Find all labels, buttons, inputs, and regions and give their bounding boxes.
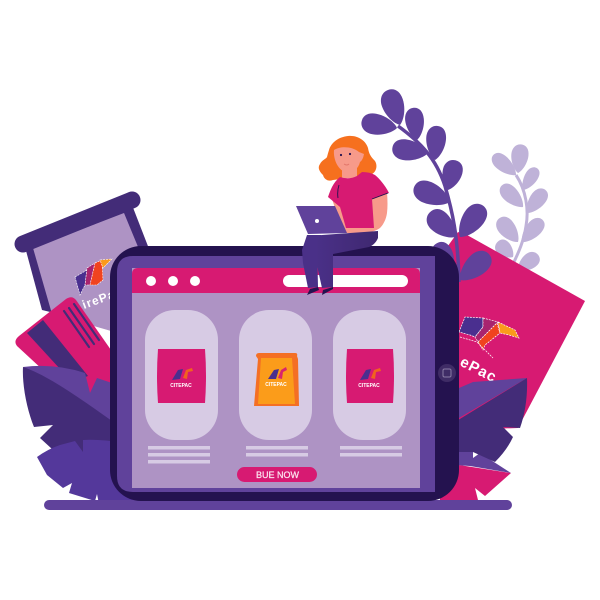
- home button: [438, 364, 456, 382]
- leaves: right cluster: [440, 378, 527, 505]
- shirt: [328, 172, 389, 228]
- jar: left package with lid: [23, 200, 165, 345]
- shoes: [307, 287, 319, 295]
- base line: [44, 500, 512, 510]
- product card 3: CITEPAC: [358, 383, 380, 389]
- product card 1: [145, 310, 218, 440]
- plant: light background sprig: [488, 143, 551, 276]
- leaves: left cluster: [23, 366, 140, 504]
- laptop: [296, 206, 347, 234]
- neck and face: [334, 147, 364, 178]
- screen: [132, 268, 420, 488]
- credit card: [15, 297, 125, 395]
- hair: [319, 136, 376, 181]
- description lines: [148, 446, 402, 464]
- product card 1: CITEPAC: [170, 383, 192, 389]
- pants: [302, 235, 322, 288]
- logo text on right sheet: ePac: [457, 353, 500, 386]
- person sitting with laptop: [296, 136, 389, 295]
- logo text on jar: irePa: [80, 287, 117, 312]
- arms: [343, 192, 388, 233]
- logo on right sheet: [459, 317, 519, 358]
- browser bar: [132, 268, 420, 293]
- poster: right pink sheet with logo: [445, 232, 585, 430]
- product card 2: CITEPAC: [265, 382, 287, 388]
- plant: dark foreground sprig: [360, 86, 496, 288]
- product card 3: [333, 310, 406, 440]
- buy button: BUE NOW: [256, 470, 299, 480]
- buy button: [237, 467, 317, 482]
- tablet: [110, 246, 459, 501]
- product card 2: [239, 310, 312, 440]
- logo on jar: [75, 259, 112, 295]
